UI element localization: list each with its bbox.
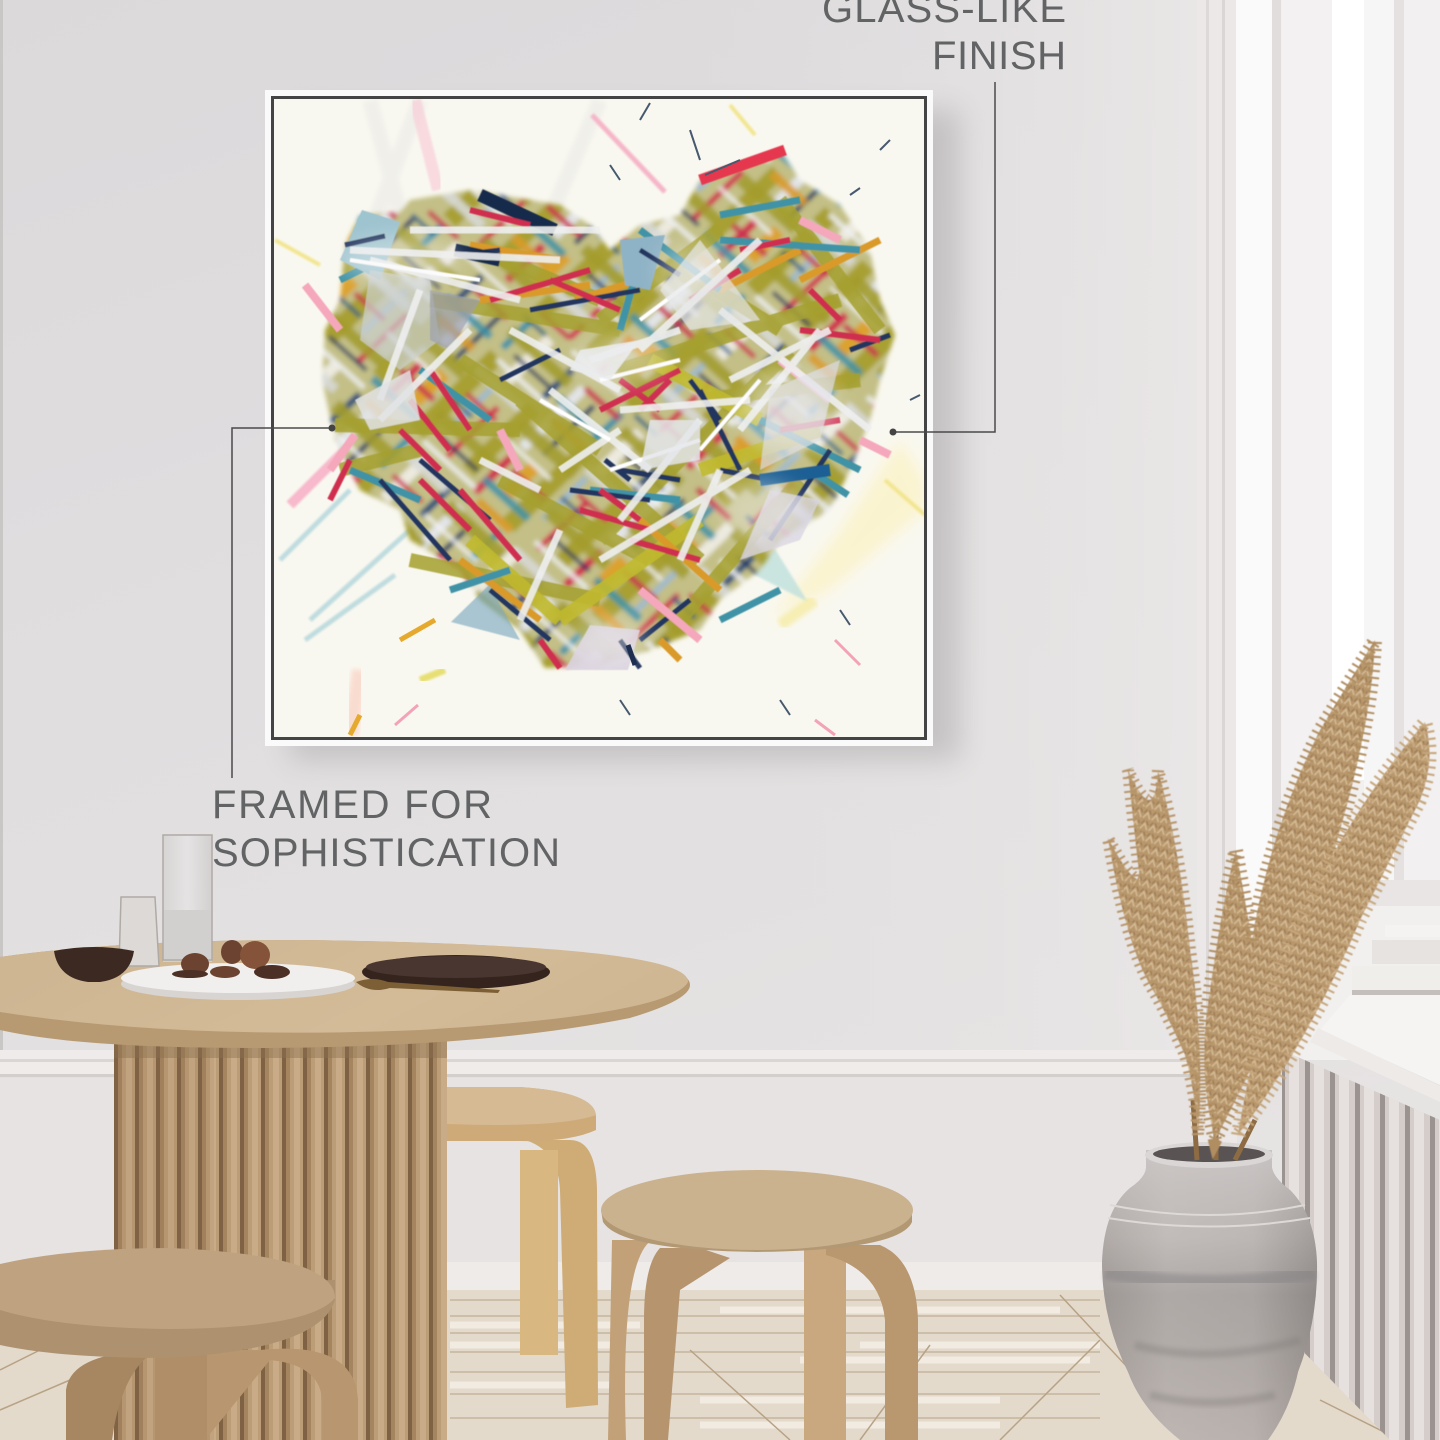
fluted table pedestal bbox=[114, 1030, 447, 1440]
callout: glass-like finish bbox=[822, 0, 1066, 78]
framed artwork bbox=[265, 90, 960, 760]
marble board with nuts bbox=[121, 940, 355, 1000]
heart painting bbox=[275, 100, 925, 735]
glass carafe bbox=[163, 835, 212, 962]
fine dark specks bbox=[610, 103, 920, 715]
connector: glass-like finish bbox=[890, 82, 995, 436]
pink strokes bbox=[305, 220, 890, 640]
window and frame bbox=[1197, 0, 1440, 1290]
plume left bbox=[1108, 770, 1200, 1135]
dark wooden bowl bbox=[54, 947, 134, 982]
brass spoons bbox=[356, 979, 500, 993]
plume middle bbox=[1204, 640, 1375, 1140]
callout: framed for sophistication: FRAMED FOR bbox=[212, 783, 492, 827]
olive strokes bbox=[335, 200, 880, 620]
back stool bbox=[447, 1087, 598, 1408]
callout: framed for sophistication: SOPHISTICATION bbox=[212, 831, 560, 875]
plume right bbox=[1238, 722, 1429, 1135]
pale blue panels bbox=[340, 210, 400, 280]
nuts bbox=[172, 940, 290, 979]
canvas bbox=[274, 99, 924, 737]
dark inner edge bbox=[271, 96, 927, 740]
round table top bbox=[0, 940, 690, 1048]
window sill bbox=[1320, 995, 1440, 1085]
soft yellow wash bbox=[770, 440, 925, 620]
dark wooden plate bbox=[362, 955, 550, 989]
strokes layered over the heart bbox=[305, 150, 890, 670]
navy strokes bbox=[345, 236, 890, 668]
inner glaze edge bbox=[272, 98, 926, 738]
orange ochre strokes bbox=[460, 240, 880, 660]
stems bbox=[1193, 1090, 1255, 1160]
front centre stool bbox=[601, 1170, 918, 1440]
frame shadow bbox=[290, 110, 960, 760]
radiator bbox=[1282, 1028, 1440, 1440]
drinking glass bbox=[119, 897, 159, 966]
white frame bbox=[265, 90, 933, 746]
callout: glass-like finish: FINISH bbox=[932, 34, 1066, 78]
soft light patches bbox=[340, 238, 840, 662]
connector: framed for sophistication bbox=[232, 424, 336, 778]
wainscot moulding bbox=[0, 1050, 1190, 1290]
floor bbox=[0, 1290, 1440, 1440]
pampas grass bbox=[1108, 640, 1429, 1160]
white slashes bbox=[350, 230, 870, 620]
faint outer rays bbox=[368, 103, 601, 210]
front left stool bbox=[0, 1248, 358, 1440]
callout: framed for sophistication bbox=[212, 783, 560, 875]
red strokes bbox=[330, 210, 880, 668]
teal strokes bbox=[340, 200, 860, 620]
ceramic vase bbox=[1102, 1142, 1317, 1440]
hatched heart body with soft edges bbox=[320, 154, 898, 672]
books on window sill bbox=[1352, 925, 1440, 995]
